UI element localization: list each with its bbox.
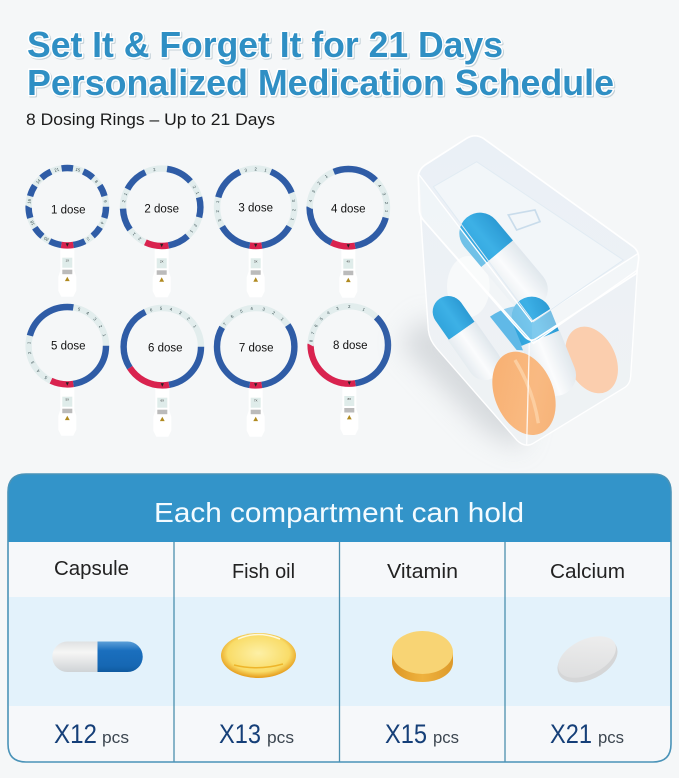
dosing ring: 6 dose: 6X — [160, 399, 164, 403]
column: calcium: pcs — [598, 728, 624, 747]
column: fish oil — [219, 561, 296, 749]
dosing ring: 1 dose: 4 — [99, 221, 105, 226]
dosing ring: 5 dose: 5 — [77, 306, 82, 312]
dosing ring: 7 dose — [217, 306, 294, 437]
dosing ring: 1 dose: 16 — [26, 198, 32, 204]
dosing ring: 6 dose: 5 — [160, 306, 163, 311]
dosing ring: 5 dose: 5 dose — [51, 341, 86, 353]
dosing ring: 4 dose: 3 — [381, 192, 387, 197]
title: Set It & Forget It for 21 Days — [27, 24, 503, 65]
column: vitamin — [385, 561, 459, 749]
dosing ring: 7 dose: 7X — [254, 399, 258, 403]
dosing ring: 5 dose: 1 — [26, 341, 32, 344]
dosing ring: 7 dose: 6 — [230, 313, 235, 319]
dosing ring: 4 dose: 4 — [377, 183, 383, 189]
dosing ring: 1 dose — [26, 166, 108, 297]
dosing ring: 3 dose: 3 — [291, 199, 296, 203]
dosing ring: 8 dose: 2 — [348, 304, 351, 309]
column: vitamin: X15 — [385, 719, 427, 749]
header bar — [8, 474, 671, 542]
dosing ring: 6 dose — [124, 306, 201, 437]
dosing ring: 8 dose: 4 — [326, 310, 331, 315]
column: calcium: X21 — [550, 719, 592, 749]
column: calcium — [550, 561, 625, 749]
dosing ring: 3 dose: 2 — [255, 166, 258, 171]
column: fish oil: pcs — [267, 728, 294, 747]
column dividers — [174, 542, 505, 762]
dosing ring: 8 dose: 5 — [319, 316, 324, 321]
dosing ring: 4 dose: 1 — [324, 173, 329, 179]
dosing ring: 2 dose: 2 — [121, 199, 126, 203]
dosing ring: 3 dose — [215, 166, 297, 297]
dosing ring: 4 dose: 4X — [346, 260, 350, 264]
dosing ring: 8 dose — [308, 304, 388, 435]
dosing ring: 5 dose: 5X — [65, 398, 69, 402]
dosing ring: 3 dose: 3 dose — [238, 202, 273, 214]
dosing ring: 6 dose: 2 — [186, 316, 192, 322]
column: fish oil: X13 — [219, 719, 261, 749]
dosing ring: 4 dose: 3 — [311, 189, 316, 194]
dosing ring: 3 dose: 3 — [217, 218, 222, 222]
dosing ring: 1 dose: 1 dose — [51, 205, 86, 217]
dosing ring: 2 dose: 2 dose — [144, 203, 179, 215]
image band — [9, 597, 670, 706]
dosing ring: 1 dose: 1X — [65, 259, 69, 263]
dosing ring: 8 dose: 7 — [310, 331, 316, 335]
header text: Each compartment can hold — [154, 497, 524, 528]
dosing ring: 2 dose: 1 — [131, 231, 137, 237]
icon: vitamin tablet — [392, 631, 453, 682]
column: vitamin: pcs — [433, 728, 459, 747]
dosing ring: 1 dose: 2 — [85, 236, 91, 242]
dosing ring: 3 dose: 3 — [244, 167, 248, 173]
dosing ring: 7 dose: 2 — [272, 310, 277, 316]
dosing ring: 4 dose: 4 dose — [331, 204, 366, 216]
dosing ring: 3 dose: 3X — [254, 259, 258, 263]
dosing ring: 8 dose: 8 — [308, 339, 314, 342]
dosing ring: 3 dose: 1 — [264, 167, 268, 173]
dosing ring: 2 dose — [121, 167, 200, 297]
column: capsule: pcs — [102, 728, 129, 747]
dosing ring: 5 dose: 1 — [102, 333, 107, 338]
title — [27, 24, 614, 103]
dosing ring: 3 dose: 2 — [291, 209, 297, 212]
dosing ring: 1 dose: 20 — [42, 235, 50, 242]
dosing ring: 8 dose: 1 — [362, 307, 366, 312]
dosing ring: 7 dose: 7 — [222, 321, 228, 326]
dosing ring: 8 dose: 8 dose — [333, 340, 368, 352]
dosing ring: 4 dose: 2 — [316, 180, 322, 185]
dosing ring: 3 dose: 1 — [215, 200, 220, 203]
column: capsule: X12 — [54, 719, 97, 749]
icon: calcium tablet — [550, 628, 625, 692]
column: vitamin: Vitamin — [387, 561, 458, 583]
dosing ring: 6 dose: 6 dose — [148, 343, 183, 355]
dosing ring: 5 dose — [26, 306, 107, 436]
dosing ring: 1 dose: 14 — [35, 178, 42, 185]
dosing ring: 1 dose: 8 — [94, 179, 99, 184]
dosing ring: 4 dose: 4 — [308, 199, 313, 203]
dosing ring: 7 dose: 3 — [262, 306, 266, 312]
icon: fish oil softgel — [221, 633, 296, 678]
dosing ring: 5 dose: 5 — [43, 375, 48, 380]
dosing ring: 7 dose: 7 dose — [239, 343, 273, 355]
capacity table panel — [8, 474, 671, 762]
dosing ring: 1 dose: 9 — [103, 200, 108, 204]
dosing ring: 4 dose: 2 — [384, 202, 389, 205]
dosing ring: 6 dose: 4 — [169, 306, 173, 312]
dosing ring: 5 dose: 4 — [85, 310, 91, 316]
dosing ring: 2 dose: 2 — [193, 223, 198, 228]
column: fish oil: Fish oil — [232, 561, 295, 583]
subtitle: 8 Dosing Rings – Up to 21 Days — [26, 110, 275, 129]
dosing ring: 8 dose: 3 — [336, 305, 340, 311]
dosing ring: 1 dose: 18 — [29, 219, 36, 226]
dosing ring: 5 dose: 3 — [92, 316, 98, 322]
column: capsule: Capsule — [54, 558, 129, 580]
dosing ring: 2 dose: 2X — [160, 259, 164, 263]
dosing ring: 2 dose: 2 — [192, 185, 197, 190]
panel border — [8, 474, 671, 762]
dosing ring: 7 dose: 5 — [239, 308, 244, 314]
dosing ring: 5 dose: 4 — [35, 368, 41, 373]
dosing ring: 2 dose: 1 — [189, 229, 194, 235]
dosing ring: 7 dose: 4 — [250, 306, 254, 311]
dosing ring: 6 dose: 6 — [149, 307, 154, 313]
translucent pill box with pills — [400, 136, 639, 450]
dosing ring: 2 dose: 2 — [137, 236, 142, 242]
dosing ring: 1 dose: 21 — [54, 166, 60, 173]
dosing ring: 6 dose: 1 — [192, 324, 198, 329]
dosing ring: 4 dose: 1 — [384, 210, 389, 213]
dosing ring: 3 dose: 2 — [215, 209, 220, 213]
dosing ring: 8 dose: 8X — [347, 397, 351, 401]
dosing ring: 7 dose: 1 — [280, 316, 285, 322]
title: Personalized Medication Schedule — [27, 62, 614, 103]
dosing ring: 6 dose: 3 — [178, 310, 183, 316]
icon: capsule — [52, 642, 143, 672]
dosing ring: 5 dose: 2 — [98, 324, 104, 329]
dosing ring: 1 dose: 15 — [75, 167, 81, 173]
dosing ring: 3 dose: 1 — [289, 217, 295, 222]
dosing ring: 5 dose: 3 — [30, 360, 35, 365]
dosing ring: 2 dose: 2 — [153, 167, 157, 172]
dosing ring: 2 dose: 1 — [123, 192, 128, 196]
dosing ring: 8 dose: 6 — [313, 323, 319, 328]
dosing ring: 2 dose: 1 — [195, 191, 200, 196]
column: calcium: Calcium — [550, 561, 625, 583]
column: capsule — [52, 558, 143, 749]
dosing ring: 4 dose — [308, 169, 389, 298]
dosing ring: 5 dose: 2 — [27, 351, 32, 355]
